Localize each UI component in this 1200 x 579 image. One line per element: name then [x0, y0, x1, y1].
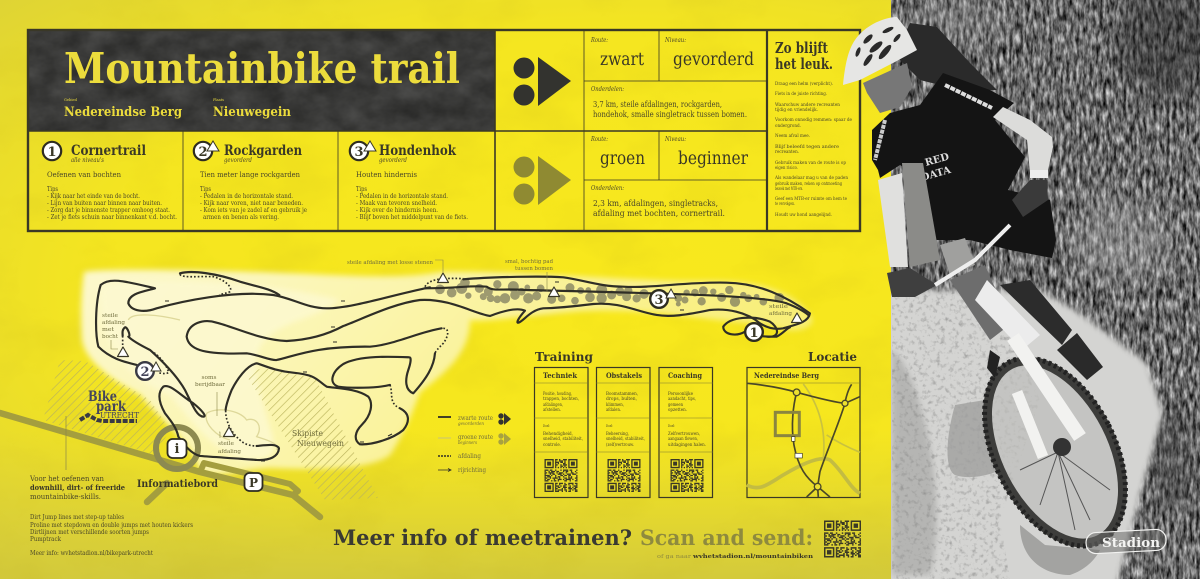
panel: Rockgarden: Tien meter lange rockgarden	[200, 170, 300, 179]
card: Coaching: aangaan flowen,	[668, 437, 698, 442]
rules list: bezoek met MTB-ers.	[775, 186, 803, 192]
rules list: Houdt uw hond aangelijnd.	[775, 212, 832, 218]
call to action: Scan and send:	[640, 525, 813, 550]
map: callout labels: tussen bomen	[515, 266, 553, 272]
rules list: Gebruik maken van de route is op	[775, 160, 846, 166]
panel: Hondenhok: Tips	[356, 186, 367, 193]
panel: Rockgarden: armen en benen als vering.	[203, 214, 279, 221]
card: Obstakels: klimmen,	[606, 403, 624, 408]
panel: Hondenhok: - Blijf boven het middelpunt van de fiets.	[356, 214, 468, 221]
rules list: Waarschuw andere recreanten	[775, 102, 840, 108]
map: terrain and hatching	[43, 270, 812, 500]
call to action: of ga naar	[657, 554, 691, 560]
text block: bikepark intro: Voor het oefenen van	[29, 474, 104, 483]
title: Mountainbike trail	[64, 44, 460, 93]
map: callout labels: afdaling	[218, 449, 241, 455]
legs and frame	[950, 265, 1103, 457]
legend: zwarte route	[458, 414, 493, 422]
map: warning triangles	[118, 273, 802, 436]
panel: Rockgarden: - Pedalen in de horizontale stand.	[200, 193, 293, 200]
panel: Hondenhok: gevorderd	[379, 157, 407, 164]
panel: Zo blijft het leuk	[774, 40, 852, 218]
panel: black route details: Onderdelen:	[591, 85, 624, 93]
map: callout labels: soms	[202, 375, 216, 381]
card: Obstakels: Beheersing,	[606, 432, 629, 437]
rules list: Geef een MTB-er ruimte om hem te	[775, 196, 847, 202]
icon: parking	[244, 473, 262, 491]
icon: information point: i	[175, 442, 180, 457]
panel: Hondenhok: - Kijk over de hindernis heen.	[356, 207, 438, 214]
label: Skipiste Nieuwegein: Skipiste	[292, 429, 323, 438]
card: Techniek: Behendigheid,	[543, 432, 573, 437]
panel: Rockgarden: - Kijk naar voren, niet naar beneden.	[200, 200, 303, 207]
card: Coaching: gemeen	[668, 403, 683, 408]
badge 1: 1	[47, 145, 57, 160]
panel: green route details	[590, 135, 749, 218]
QR code	[608, 459, 640, 492]
card: Coaching	[659, 368, 713, 498]
map: callout labels: bocht	[102, 334, 119, 340]
card: Obstakels: Obstakels	[606, 371, 642, 380]
panel: green route details: 2,3 km, afdalingen, singletracks,	[593, 198, 718, 208]
backpack	[895, 23, 997, 90]
logo: Bike park Utrecht	[80, 389, 140, 421]
card: Obstakels: snelheid, stabiliteit,	[606, 437, 645, 442]
rules list: Als wandelaar mag u van de paden	[774, 175, 848, 181]
map: callout labels: afdaling	[769, 311, 792, 317]
map: downhill dotted segments	[123, 274, 463, 446]
panel: Hondenhok: Hondenhok	[379, 143, 456, 159]
map: black route	[96, 272, 810, 460]
logo: Bike park Utrecht: Bike	[88, 389, 117, 405]
rules list: Voorkom onnodig remmen: spaar de	[774, 117, 852, 123]
card: Coaching: aandacht, tips,	[668, 397, 696, 402]
rules list: Draag een helm (verplicht).	[775, 80, 833, 87]
map: badge 2: 2	[140, 365, 150, 380]
card: Coaching: Zelfvertrouwen,	[668, 432, 700, 437]
text block: bikepark intro	[29, 416, 193, 557]
map: badge 3	[650, 289, 676, 308]
card: Obstakels: (zelf)vertrouw.	[606, 443, 634, 448]
QR code	[544, 459, 578, 492]
legend: afdaling	[458, 452, 481, 460]
heading: Locatie: Locatie	[808, 349, 857, 364]
panel: Rockgarden: Tips	[200, 186, 211, 193]
card: Obstakels: Boomstammen,	[606, 392, 638, 397]
card: Techniek: controle.	[543, 443, 561, 448]
map: badge 1: 1	[749, 326, 759, 341]
card: Techniek: afstellen.	[543, 408, 561, 413]
panel: green route details: beginner	[678, 149, 749, 169]
text block: bikepark intro: Pumptrack	[30, 536, 61, 543]
card: Techniek: afdalingen,	[543, 403, 563, 408]
map: callout labels: berijdbaar	[195, 382, 225, 388]
panel: Cornertrail: Oefenen van bochten	[47, 170, 121, 179]
rules list: te vervolgen.	[775, 201, 795, 207]
card: Techniek: Techniek	[543, 371, 577, 380]
panel: location map: Nedereindse Berg	[754, 371, 819, 380]
rules list: Fiets in de juiste richting.	[775, 91, 827, 97]
logo: Bike park Utrecht: UTRECHT	[100, 411, 140, 420]
panel: Cornertrail: Cornertrail	[71, 143, 146, 159]
legend: groene route	[458, 433, 493, 441]
panel: title header	[27, 29, 495, 131]
icon: information point	[168, 439, 186, 458]
trail shadow patches	[948, 400, 1000, 477]
rules list	[774, 80, 852, 218]
panel: black route details: 3,7 km, steile afdalingen, rockgarden,	[593, 99, 722, 109]
map: badge 3: 3	[654, 293, 664, 308]
panel: Cornertrail	[43, 142, 177, 221]
card: Techniek	[534, 368, 588, 498]
card: Techniek: trappen, bochten,	[543, 397, 579, 402]
map: callout labels: smal, bochtig pad	[505, 259, 553, 265]
jersey print: RED	[924, 151, 951, 169]
logo: Stadion	[1086, 529, 1167, 554]
panel: Cornertrail: Tips	[47, 186, 58, 193]
QR code	[824, 520, 861, 558]
panel: green route details: afdaling met bochten, cornertrail.	[593, 208, 725, 218]
helmet	[843, 17, 917, 85]
panel: location map	[747, 368, 860, 498]
card: Obstakels: drops, bulten,	[606, 397, 637, 402]
panel: Hondenhok: - Pedalen in de horizontale stand.	[356, 193, 448, 200]
logo: Stadion: Stadion	[1102, 536, 1161, 551]
panel: green route details: Route:	[590, 135, 608, 143]
panel: Cornertrail: - Kijk naar het einde van de bocht.	[47, 193, 140, 200]
label: Skipiste Nieuwegein: Nieuwegein	[297, 439, 344, 448]
call to action: wvhetstadion.nl/mountainbiken	[692, 554, 814, 560]
map: roads and informatiebord ring	[0, 413, 320, 517]
map: badge 1	[745, 323, 763, 341]
location labels: Nieuwegein	[213, 105, 291, 120]
card: Techniek: snelheid, stabiliteit,	[543, 437, 583, 442]
card: Coaching: Persoonlijke	[668, 392, 693, 397]
location labels: Nedereindse Berg	[64, 105, 182, 120]
icon: green route	[514, 156, 571, 205]
panel: black route details: Route:	[590, 36, 608, 44]
rules list: ondergrond.	[775, 123, 801, 129]
map: callout labels	[102, 259, 792, 455]
panel: black route details: hondehok, smalle singletrack tussen bomen.	[593, 109, 747, 119]
card: Techniek: Positie, houding,	[543, 392, 572, 397]
panel: Hondenhok: Houten hindernis	[356, 170, 417, 179]
icon: parking: P	[249, 476, 258, 490]
rules list: eigen risico.	[775, 165, 798, 171]
bike wheel	[956, 335, 1154, 569]
panel: Cornertrail: alle niveau's	[71, 157, 104, 164]
badge 3: 3	[354, 145, 364, 160]
card: Obstakels: Doel:	[606, 424, 613, 428]
panel: green route details: Onderdelen:	[591, 184, 624, 192]
panel: black route details: Niveau:	[664, 36, 686, 44]
label: Skipiste Nieuwegein	[292, 429, 344, 448]
location labels: Gebied	[64, 98, 78, 102]
text block: bikepark intro: downhill, dirt- of freeride	[30, 483, 125, 492]
photo: mountain biker	[843, 17, 1154, 569]
panel: Hondenhok	[350, 141, 468, 221]
card: Coaching: Coaching	[668, 371, 702, 380]
panel: Cornertrail: - Zet je fiets schuin naar binnenkant v.d. bocht.	[47, 214, 177, 221]
label: Informatiebord: Informatiebord	[137, 479, 218, 490]
text block: bikepark intro: Meer info: wvhetstadion.nl/bikepark-utrecht	[30, 550, 154, 557]
map: badge 2	[136, 362, 161, 380]
card: Obstakels: afdalen.	[606, 408, 621, 413]
panel: black route details	[590, 36, 754, 119]
photo: grass and trail	[891, 0, 1200, 579]
legend: rijrichting	[458, 466, 486, 474]
call to action	[333, 520, 861, 560]
legend: gevorderden	[458, 421, 484, 426]
map: callout labels: steile	[769, 304, 789, 310]
logo: Bike park Utrecht: park	[96, 399, 126, 415]
rules list: tijdig en vriendelijk.	[775, 107, 818, 113]
map: callout labels: steile	[102, 313, 119, 319]
panel: Rockgarden	[194, 141, 307, 221]
text block: bikepark intro: mountainbike-skills.	[30, 492, 101, 501]
panel: Rockgarden: gevorderd	[224, 157, 252, 164]
location labels: Plaats	[213, 98, 224, 102]
panel: Zo blijft het leuk: Zo blijft	[775, 40, 828, 57]
location labels	[64, 98, 291, 120]
panel: Rockgarden: Rockgarden	[224, 143, 302, 159]
text block: bikepark intro: Proline met stepdown en double jumps met houten kickers	[30, 522, 193, 529]
text block: bikepark intro: Dirt Jump lines met step-up tables	[30, 514, 124, 521]
panel: Zo blijft het leuk: het leuk.	[775, 56, 833, 73]
text block: bikepark intro: Dirtlijnen met verschillende soorten jumps	[30, 529, 149, 536]
panel: black route details: zwart	[600, 50, 644, 70]
call to action: Meer info of meetrainen?	[333, 525, 632, 550]
map: trees	[436, 279, 783, 306]
rules list: recreanten.	[775, 149, 799, 155]
map: callout labels: met	[102, 327, 115, 333]
panel: green route details: groen	[600, 149, 645, 169]
panel: green route details: Niveau:	[664, 135, 686, 143]
jersey print: DATA	[920, 165, 952, 184]
panel: black route details: gevorderd	[673, 50, 754, 70]
face	[863, 63, 912, 113]
card: Coaching: opzetten.	[668, 408, 687, 413]
badge 2: 2	[198, 145, 208, 160]
icon: black route	[514, 57, 571, 106]
card: Coaching: uitdagingen halen.	[668, 443, 706, 448]
QR code	[670, 459, 704, 492]
heading: Training: Training	[535, 349, 593, 364]
map: callout labels: afdaling	[102, 320, 125, 326]
map: callout labels: steile afdaling met losse stenen	[347, 260, 433, 266]
jersey and shorts	[872, 73, 1056, 258]
card: Obstakels	[596, 368, 650, 498]
map: direction arrows	[96, 282, 684, 461]
panel: Rockgarden: - Kom iets van je zadel af en gebruik je	[200, 207, 307, 214]
panel: main frame with dividers	[27, 29, 860, 231]
card: Techniek: Doel:	[543, 424, 550, 428]
map: callout labels: steile	[218, 441, 235, 447]
jersey print	[875, 85, 992, 184]
card: Coaching: Doel:	[668, 424, 675, 428]
rules list: Neem afval mee.	[775, 133, 810, 139]
legend	[438, 413, 511, 474]
map: green route	[128, 315, 277, 450]
panel: Hondenhok: - Maak van tevoren snelheid.	[356, 200, 437, 207]
panel: Cornertrail: - Lijn van buiten naar binnen naar buiten.	[47, 200, 162, 207]
panel: Cornertrail: - Zorg dat je binnenste trapper omhoog staat.	[47, 207, 170, 214]
arms	[878, 107, 1053, 297]
rules list: gebruik maken, reken op ontmoeting	[775, 181, 842, 187]
rules list: Blijf beleefd tegen andere	[775, 144, 839, 150]
legend: beginners	[458, 440, 477, 445]
